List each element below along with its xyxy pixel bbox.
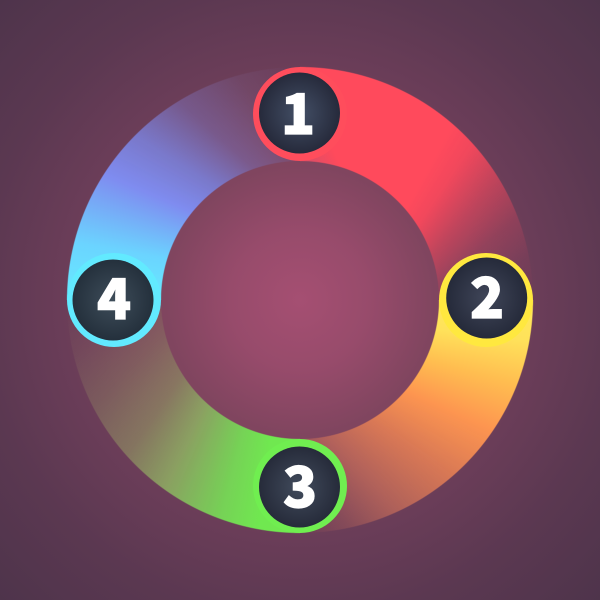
ring segment 1: red [300,66,530,295]
badge 4 [67,253,161,347]
badge 1: 1 [281,70,315,151]
badge 3: 3 [283,443,317,524]
ring segment 3: green [72,306,300,534]
ring segment 4: cyan to blue [66,71,333,300]
ring segment 2: yellow to orange [303,300,534,532]
badge 2: 2 [470,254,504,335]
badge 3 [253,439,347,533]
badge 2 [439,253,533,347]
badge 4: 4 [97,255,131,336]
badge 1 [253,67,347,161]
